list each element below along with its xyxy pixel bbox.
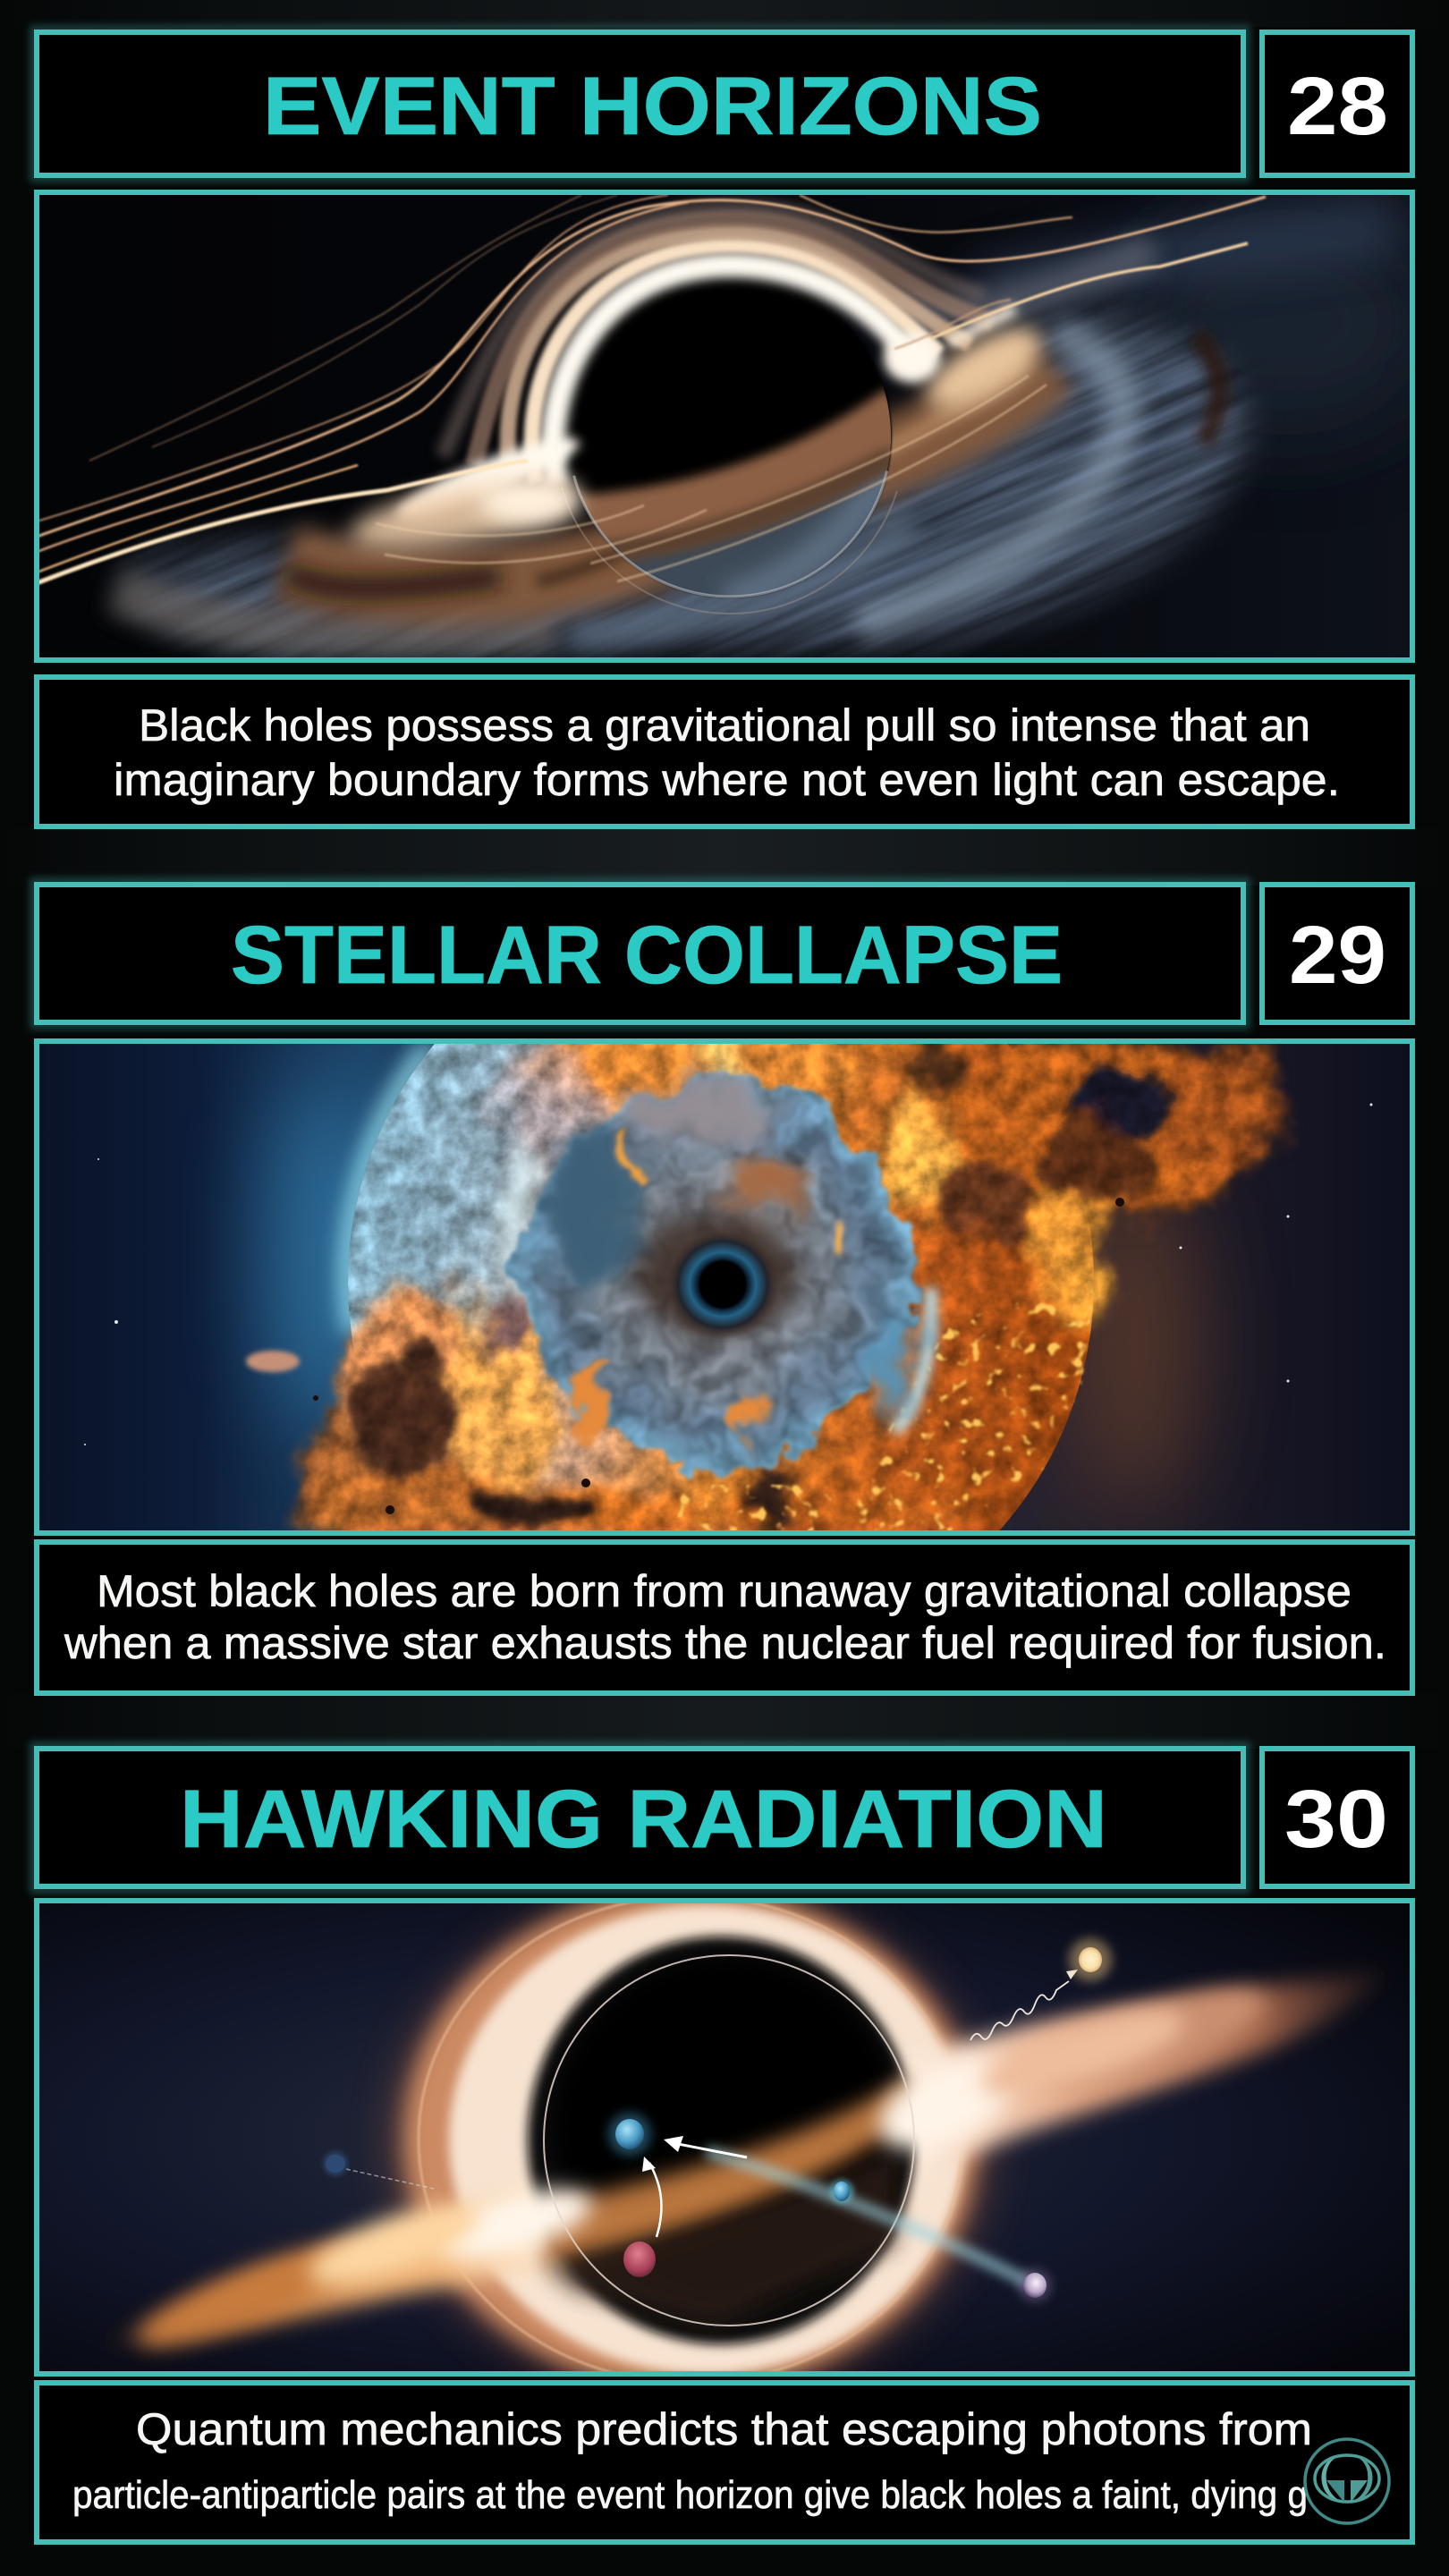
- caption: stellar collapse: when a massive star exhausts the nuclear fuel required for fusion.: [64, 1618, 1386, 1668]
- vortex: [633, 1216, 798, 1334]
- arrow: wavy photon: [970, 1970, 1078, 2040]
- heading: stellar collapse: STELLAR COLLAPSE: [231, 910, 1063, 1001]
- heading: hawking radiation: HAWKING RADIATION: [180, 1774, 1107, 1865]
- dark smoke: [347, 1039, 1168, 1535]
- dashed trail: [346, 2169, 434, 2189]
- outer halo: [391, 1887, 990, 2397]
- bright disk cores: [429, 2175, 599, 2272]
- logo badge: [1305, 2439, 1389, 2523]
- brown disk band: [286, 362, 1046, 585]
- inner crater: [513, 1154, 530, 1297]
- caption: stellar collapse: [37, 1542, 1412, 1693]
- caption: event horizons: [37, 677, 1412, 826]
- particle: pink: [623, 2241, 656, 2277]
- panel: event horizons: [26, 21, 1415, 829]
- arrow: pink particle upward: [642, 2157, 661, 2237]
- caption: stellar collapse: Most black holes are born from runaway gravitational collapse: [97, 1566, 1352, 1616]
- number badge: 28: 28: [1287, 61, 1388, 152]
- heading: stellar collapse: [34, 882, 1246, 1025]
- number badge: 29: 29: [1289, 910, 1386, 1001]
- pink dust and debris: [246, 1351, 300, 1372]
- particle: cyan: [829, 2179, 854, 2204]
- bright ring: [553, 265, 908, 487]
- lower disk crossing hole: [556, 413, 905, 608]
- panel: hawking radiation: [34, 1746, 1412, 2542]
- number badge: 28: [1262, 32, 1412, 175]
- event horizon line: [544, 1955, 914, 2326]
- disk streak lines: [376, 376, 1046, 581]
- black hole: [528, 1936, 914, 2344]
- illustration: collapsing star: [37, 910, 1412, 1656]
- panel: stellar collapse: [34, 882, 1412, 1693]
- illustration: black hole with accretion disk: [34, 190, 1415, 663]
- star sphere: [348, 1046, 429, 1333]
- blue particle trail: [707, 2151, 1029, 2283]
- number badge: 30: 30: [1284, 1774, 1388, 1865]
- blue-grey swirl: [107, 301, 1263, 657]
- streaming light lines: [37, 195, 1266, 552]
- disk behind: [106, 1970, 1388, 2344]
- heading: event horizons: EVENT HORIZONS: [263, 61, 1042, 152]
- caption: hawking radiation: [37, 2383, 1412, 2542]
- number badge: 29: [1262, 885, 1412, 1022]
- cream swirl: [390, 425, 585, 532]
- heading: event horizons: [34, 30, 1246, 178]
- caption: event horizons: Black holes possess a gravitational pull so intense that an: [139, 700, 1310, 750]
- event horizon: [568, 274, 892, 597]
- caption: event horizons: imaginary boundary forms where not even light can escape.: [114, 755, 1340, 805]
- number badge: 30: [1262, 1749, 1412, 1886]
- particle: cream photon: [1069, 1938, 1112, 1981]
- illustration: hawking radiation diagram: [37, 1887, 1412, 2397]
- stars: [84, 1104, 1372, 1445]
- particle: blue: [608, 2113, 651, 2156]
- particle: small blue left: [323, 2151, 348, 2176]
- arrow: infalling trail: [664, 2136, 747, 2157]
- caption: hawking radiation: Quantum mechanics predicts that escaping photons from: [136, 2404, 1312, 2454]
- disk front: [537, 2075, 921, 2267]
- caption: hawking radiation: particle-antiparticle pairs at the event horizon give black holes a faint, dying g: [72, 2473, 1308, 2517]
- particle: purple: [1019, 2269, 1051, 2301]
- heading: hawking radiation: [34, 1746, 1246, 1889]
